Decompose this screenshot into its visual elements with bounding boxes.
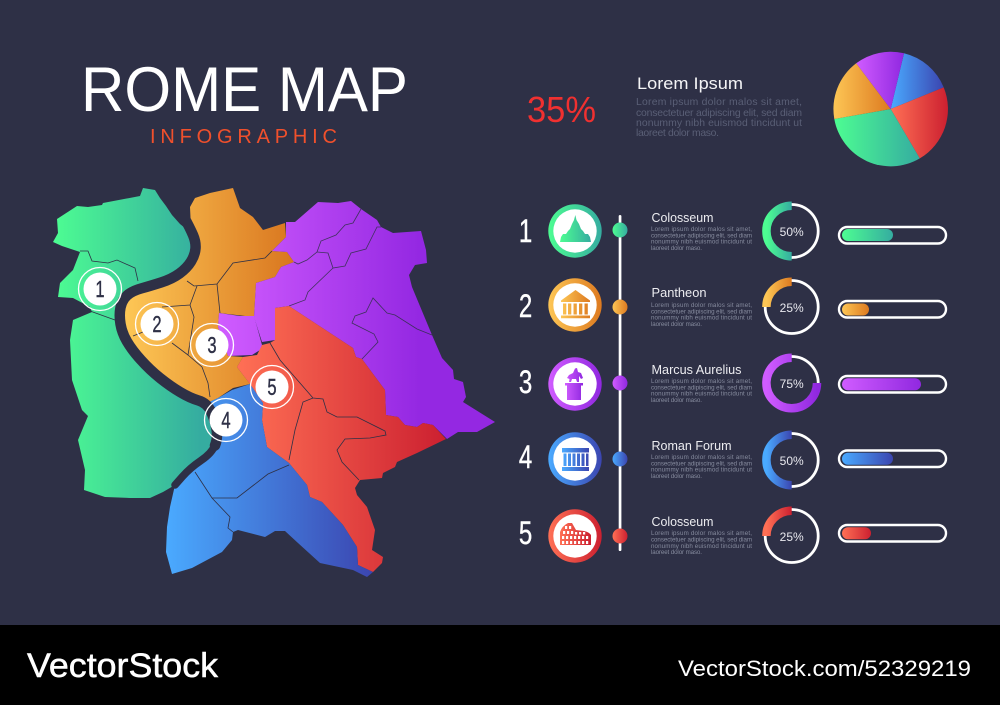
donut chart 50%: 50% — [780, 454, 804, 468]
row text: laoreet dolor maso. — [651, 549, 702, 556]
row text: consectetuer adipiscing elit, sed diam — [651, 308, 752, 315]
row text: consectetuer adipiscing elit, sed diam — [651, 460, 752, 467]
row title: Pantheon — [652, 286, 707, 300]
row title: Marcus Aurelius — [652, 363, 742, 377]
row text: consectetuer adipiscing elit, sed diam — [651, 384, 752, 391]
row text: nonummy nibh euismod tincidunt ut — [651, 315, 752, 322]
icon: forum columns — [548, 432, 602, 486]
region: green district — [53, 188, 218, 498]
map marker 4: 4 — [221, 408, 231, 434]
icon: temple — [548, 278, 602, 332]
row title: Colosseum — [652, 515, 714, 529]
map marker 1 — [78, 268, 122, 310]
region: blue district — [166, 384, 373, 577]
icon: equestrian statue — [548, 357, 602, 411]
subtitle: INFOGRAPHIC — [150, 126, 342, 148]
map marker 2 — [136, 302, 178, 346]
row text — [651, 530, 752, 556]
map marker 2: 2 — [152, 312, 162, 338]
donut chart 50%: 50% — [780, 225, 804, 239]
callout body text: laoreet dolor maso. — [636, 128, 719, 139]
map marker 3 — [190, 324, 234, 366]
row 3: Marcus Aurelius — [519, 356, 946, 411]
timeline line — [619, 215, 621, 551]
river Tiber — [120, 217, 217, 485]
icon: colosseum — [548, 509, 602, 563]
row text: Lorem ipsum dolor malos sit amet, — [651, 454, 752, 461]
donut chart 50% — [765, 434, 818, 486]
map marker 3: 3 — [207, 333, 217, 359]
region: purple district — [218, 201, 495, 439]
row text — [651, 226, 752, 252]
row text: laoreet dolor maso. — [651, 397, 702, 404]
row text — [651, 302, 752, 328]
row number: 3 — [519, 364, 532, 400]
row number: 1 — [519, 213, 532, 249]
row text — [651, 378, 752, 404]
map marker 5: 5 — [267, 375, 277, 401]
row text: laoreet dolor maso. — [651, 473, 702, 480]
row 1: Colosseum — [519, 204, 946, 258]
row number: 2 — [519, 288, 532, 324]
map marker 4 — [204, 398, 248, 442]
callout body text: consectetuer adipiscing elit, sed diam — [636, 108, 802, 119]
row 4: Roman Forum — [519, 432, 946, 486]
donut chart 25%: 25% — [780, 530, 804, 544]
donut chart 75%: 75% — [780, 377, 804, 391]
progress bar — [839, 450, 946, 467]
row text: nonummy nibh euismod tincidunt ut — [651, 391, 752, 398]
map marker 5 — [250, 366, 294, 408]
row text: Lorem ipsum dolor malos sit amet, — [651, 226, 752, 233]
row text: Lorem ipsum dolor malos sit amet, — [651, 302, 752, 309]
timeline dot — [612, 300, 628, 314]
row text: nonummy nibh euismod tincidunt ut — [651, 543, 752, 550]
callout body text — [636, 97, 802, 139]
row number: 5 — [519, 515, 532, 551]
progress bar — [839, 227, 946, 244]
title: ROME MAP — [81, 55, 408, 125]
row text: consectetuer adipiscing elit, sed diam — [651, 536, 752, 544]
row title: Colosseum — [652, 211, 714, 225]
footer id: VectorStock.com/52329219 — [678, 656, 971, 681]
row text: Lorem ipsum dolor malos sit amet, — [651, 530, 752, 537]
progress bar — [839, 525, 946, 542]
timeline dot — [612, 452, 628, 466]
progress bar — [839, 301, 946, 318]
row 5: Colosseum — [519, 509, 946, 563]
map of Rome — [53, 188, 495, 577]
row text: nonummy nibh euismod tincidunt ut — [651, 467, 752, 474]
region: orange district — [119, 188, 294, 403]
region: red district — [237, 306, 446, 572]
pie chart — [833, 52, 948, 166]
timeline dot — [612, 528, 628, 544]
row text — [651, 454, 752, 480]
callout heading: Lorem Ipsum — [637, 74, 743, 93]
row number: 4 — [519, 439, 532, 475]
donut chart 25% — [765, 510, 818, 562]
timeline dot — [612, 376, 628, 390]
map marker 1: 1 — [95, 277, 105, 303]
timeline dot — [612, 222, 628, 238]
row title: Roman Forum — [652, 439, 732, 453]
row text: laoreet dolor maso. — [651, 321, 702, 328]
row text: laoreet dolor maso. — [651, 245, 702, 252]
donut chart 25%: 25% — [780, 301, 804, 315]
icon: domed basilica — [548, 204, 602, 258]
progress bar — [839, 376, 946, 392]
donut chart 25% — [765, 280, 818, 334]
footer logo: VectorStock — [27, 647, 219, 685]
callout body text: nonummy nibh euismod tincidunt ut — [636, 118, 802, 129]
row text: Lorem ipsum dolor malos sit amet, — [651, 378, 752, 385]
footer bar — [0, 625, 1000, 705]
donut chart 50% — [765, 204, 818, 258]
callout: 35%: 35% — [527, 89, 596, 130]
row 2: Pantheon — [519, 278, 946, 334]
callout body text: Lorem ipsum dolor malos sit amet, — [636, 97, 802, 108]
row text: consectetuer adipiscing elit, sed diam — [651, 232, 752, 239]
donut chart 75% — [765, 356, 818, 410]
row text: nonummy nibh euismod tincidunt ut — [651, 239, 752, 246]
